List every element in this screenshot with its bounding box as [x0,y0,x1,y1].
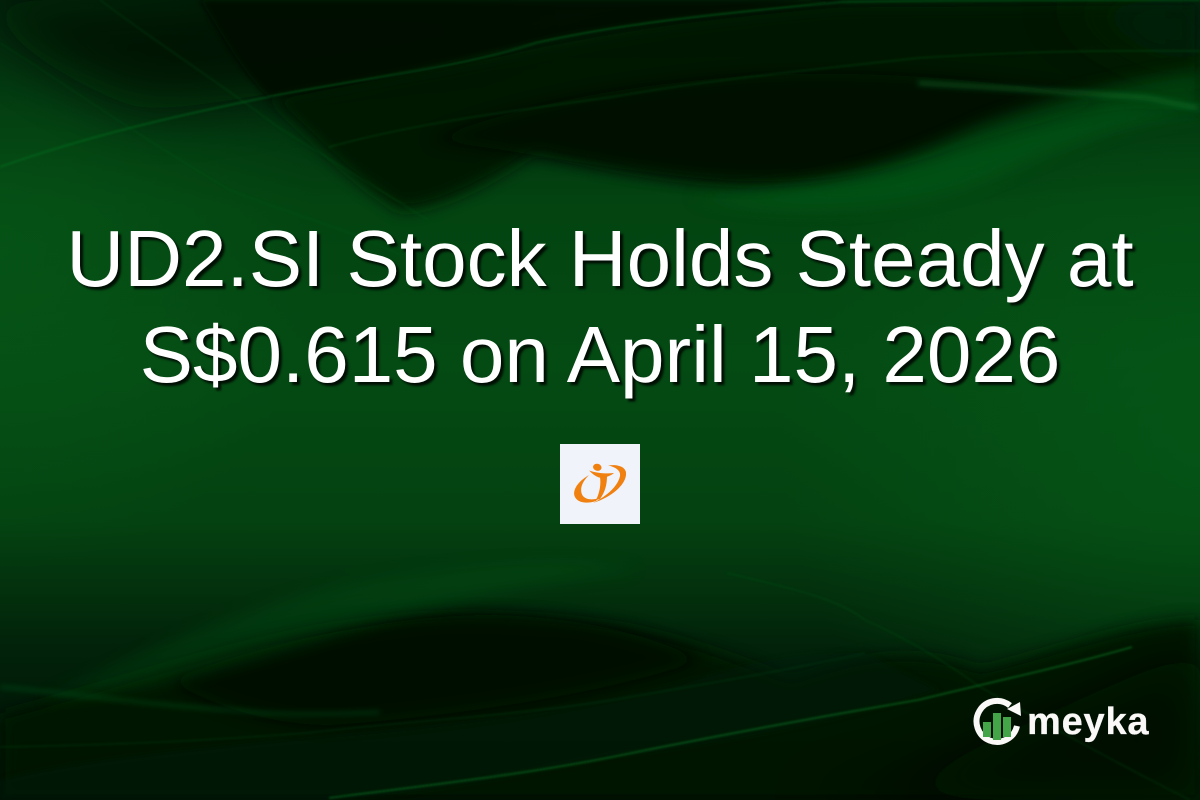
title: S$0.615 on April 15, 2026 [140,310,1060,399]
bright band under the top lens [690,70,1200,209]
wordmark: meyka [1027,701,1149,743]
title [66,214,1138,402]
title: UD2.SI Stock Holds Steady at [66,214,1134,303]
brand: meyka logo [973,698,1149,745]
bottom dark mass [0,615,1200,800]
soft darkening in the top-left corner [0,0,500,110]
icon: company logo [560,444,640,524]
icon: circular arrow with bars [977,701,1021,742]
bright band over bottom hill [40,563,640,700]
